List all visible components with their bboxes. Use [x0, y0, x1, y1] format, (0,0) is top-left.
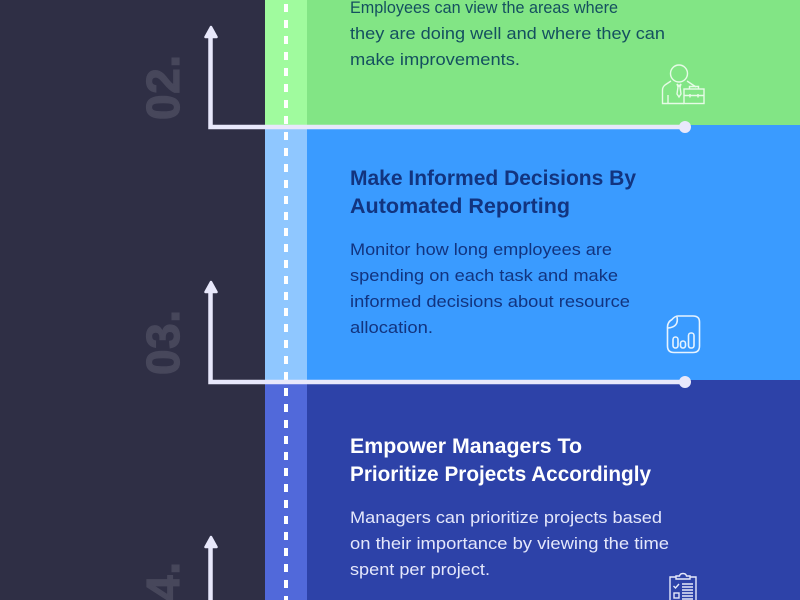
arrow: connector 03	[206, 282, 691, 388]
panel: prioritize projects (dark blue)	[265, 380, 800, 600]
panel: employee feedback (green)	[265, 0, 800, 125]
heading: dark blue panel: Prioritize Projects Accordingly	[350, 463, 651, 486]
text block: dark blue panel body: Managers can prioritize projects based	[350, 508, 662, 527]
text block: blue panel body: informed decisions about resource	[350, 292, 630, 311]
text block: blue panel body: spending on each task and make	[350, 266, 618, 285]
text block: dark blue panel body	[350, 508, 669, 579]
number: 03.: 03.	[137, 310, 189, 375]
icon: employee with briefcase	[662, 65, 704, 104]
heading: blue panel	[350, 167, 636, 218]
text block: green panel body	[350, 0, 665, 69]
arrow: connector 04	[206, 537, 216, 600]
arrow: connector 02	[206, 27, 691, 133]
number: 02.: 02.	[137, 55, 189, 120]
heading: blue panel: Automated Reporting	[350, 195, 570, 218]
heading: dark blue panel: Empower Managers To	[350, 435, 582, 458]
text block: dark blue panel body: on their importance by viewing the time	[350, 534, 669, 553]
dashed centre line	[284, 0, 288, 600]
background: dark left panel	[0, 0, 265, 600]
text block: blue panel body: allocation.	[350, 318, 433, 337]
heading: blue panel: Make Informed Decisions By	[350, 167, 636, 190]
panel: automated reporting (blue)	[265, 125, 800, 380]
text block: green panel body: they are doing well and where they can	[350, 24, 665, 43]
text block: green panel body: make improvements.	[350, 50, 520, 69]
text block: dark blue panel body: spent per project.	[350, 560, 490, 579]
icon: report document with bars	[668, 316, 700, 352]
icon: clipboard checklist	[670, 574, 696, 600]
text block: blue panel body: Monitor how long employees are	[350, 240, 612, 259]
heading: dark blue panel	[350, 435, 651, 486]
text block: blue panel body	[350, 240, 630, 337]
